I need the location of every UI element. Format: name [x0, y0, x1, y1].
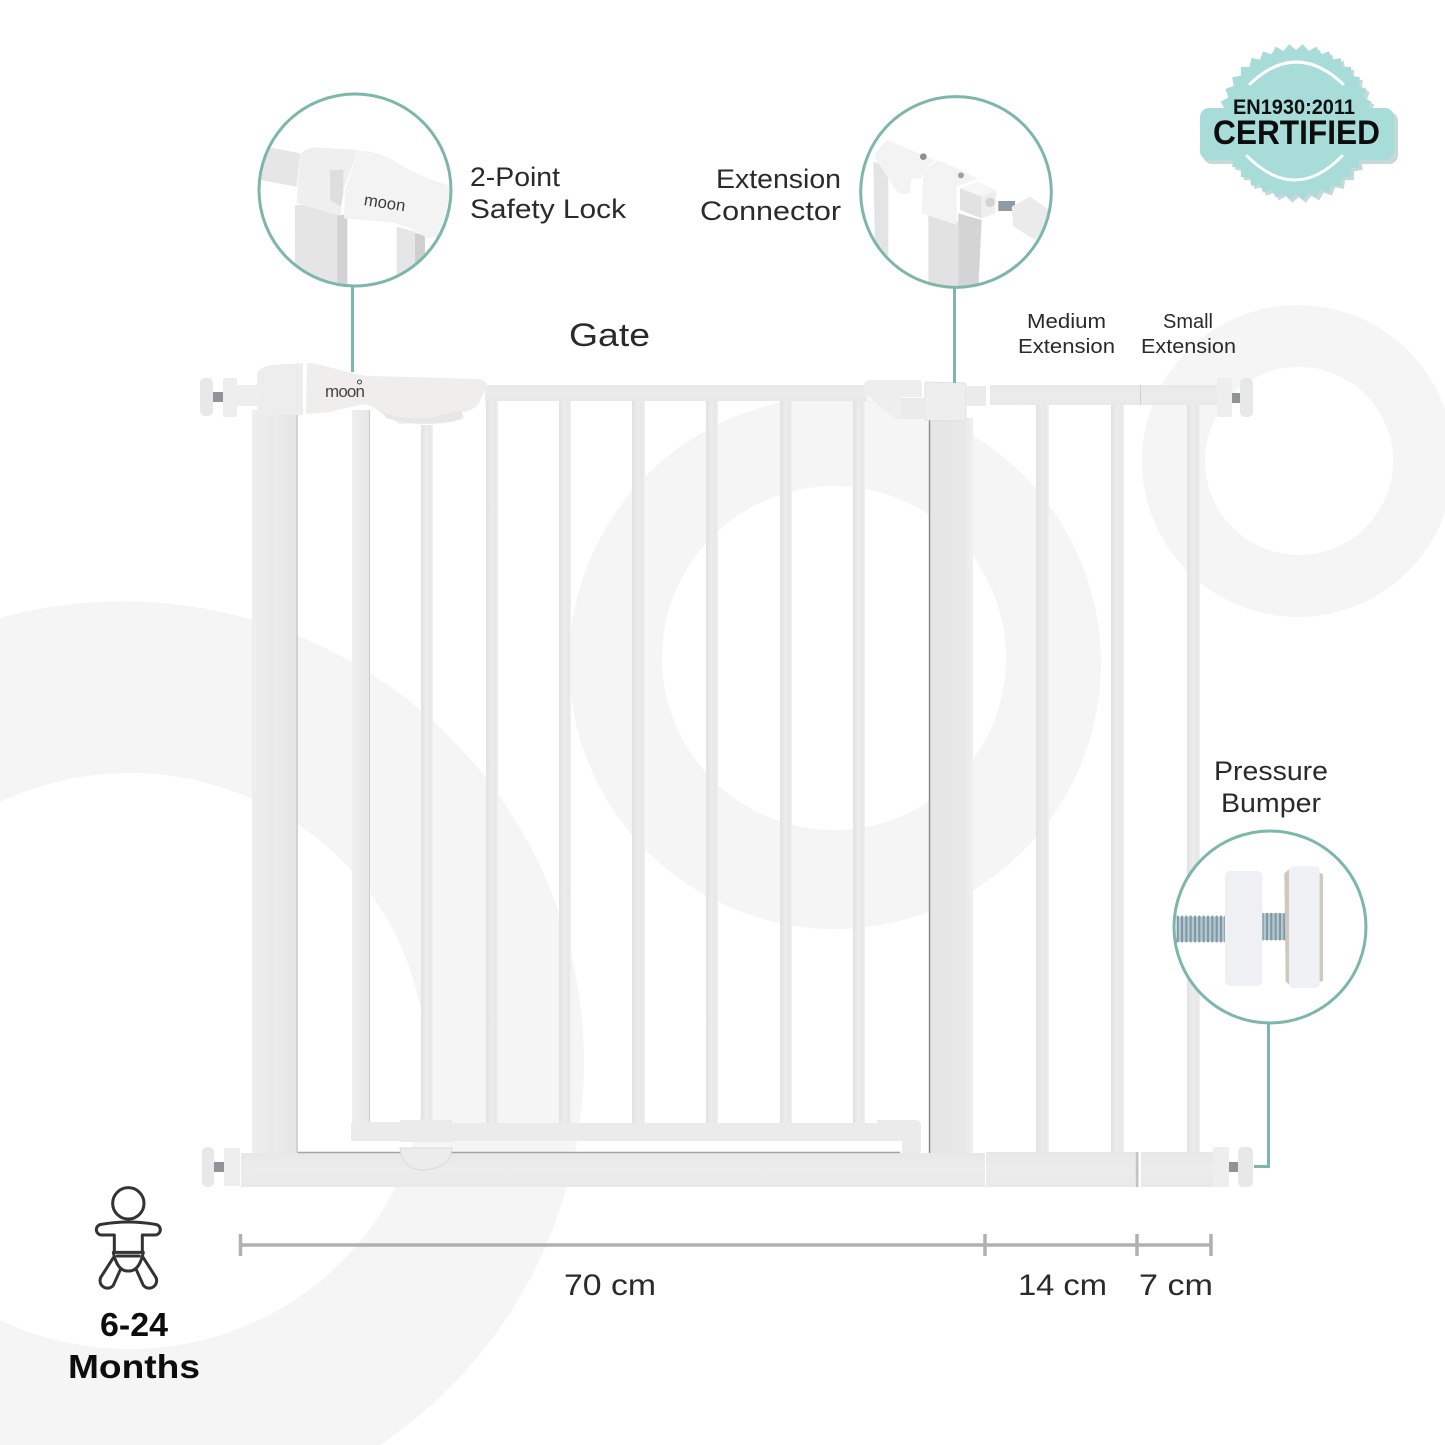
- background rings: [0, 305, 1445, 1445]
- callout circle: safety lock: moon: [363, 190, 407, 215]
- label: age range: [68, 1306, 200, 1385]
- bumper top left: [200, 378, 237, 417]
- top left stub: [236, 385, 260, 406]
- safety gate product: [200, 363, 1253, 1187]
- callout circle: extension connector: [861, 97, 1052, 290]
- label: Pressure Bumper: [1214, 756, 1328, 818]
- certified badge: CERTIFIED: [1213, 114, 1380, 152]
- badge text: EN1930:2011: [1233, 96, 1355, 119]
- handle under piece: [383, 410, 462, 424]
- label: Gate: Gate: [569, 317, 650, 353]
- gate vertical bars: [352, 398, 865, 1125]
- badge shadow: [1203, 47, 1398, 203]
- label: Small Extension: [1141, 311, 1236, 358]
- bottom lock catch: [400, 1148, 452, 1170]
- dimension labels: 7 cm: [1139, 1269, 1213, 1302]
- label: Small Extension: Extension: [1141, 336, 1236, 358]
- callout circle: safety lock: [259, 94, 453, 292]
- badge seal: [1200, 44, 1394, 200]
- bumper bottom left: [202, 1147, 240, 1187]
- extension bars: [1036, 405, 1200, 1153]
- label: Extension Connector: [700, 164, 841, 226]
- dimension labels: 70 cm: [564, 1269, 656, 1302]
- extension top rails: [990, 385, 1217, 405]
- callout circle: pressure bumper: [1174, 831, 1366, 1023]
- label: age range: 6-24: [100, 1306, 169, 1343]
- top right block: [925, 382, 966, 421]
- callout leader lines: [352, 285, 1268, 1166]
- label: Pressure Bumper: Pressure: [1214, 756, 1328, 786]
- label: Small Extension: Small: [1163, 311, 1213, 333]
- label: Medium Extension: Medium: [1027, 311, 1106, 333]
- logo on gate: moon: [325, 382, 365, 401]
- dimension labels: [564, 1269, 1213, 1302]
- label: 2-Point Safety Lock: 2-Point: [470, 162, 561, 192]
- left frame post: [252, 410, 298, 1155]
- label: Extension Connector: Extension: [716, 164, 841, 194]
- right frame post: [929, 418, 973, 1155]
- dimension labels: 14 cm: [1018, 1269, 1107, 1302]
- lock handle: [306, 363, 487, 424]
- label: Medium Extension: Extension: [1018, 336, 1115, 358]
- icon: baby: [96, 1188, 160, 1288]
- badge arcs: [1247, 62, 1343, 180]
- label: 2-Point Safety Lock: Safety Lock: [470, 194, 627, 224]
- lock left block: [257, 363, 303, 415]
- extension bottom rails: [986, 1152, 1213, 1187]
- top right hinge: [864, 380, 922, 419]
- label: Medium Extension: [1018, 311, 1115, 358]
- label: age range: Months: [68, 1348, 200, 1385]
- gate lower rail: [351, 1120, 921, 1153]
- bottom frame: [241, 1153, 985, 1187]
- label: 2-Point Safety Lock: [470, 162, 627, 224]
- gate top rail: [485, 385, 867, 401]
- label: Extension Connector: Connector: [700, 196, 841, 226]
- bumper bottom right: [1213, 1147, 1253, 1187]
- bumper top right: [1217, 378, 1253, 417]
- certified badge: [1200, 44, 1398, 203]
- label: Pressure Bumper: Bumper: [1221, 788, 1321, 818]
- dimension line: [240, 1234, 1212, 1256]
- connector: [966, 386, 986, 406]
